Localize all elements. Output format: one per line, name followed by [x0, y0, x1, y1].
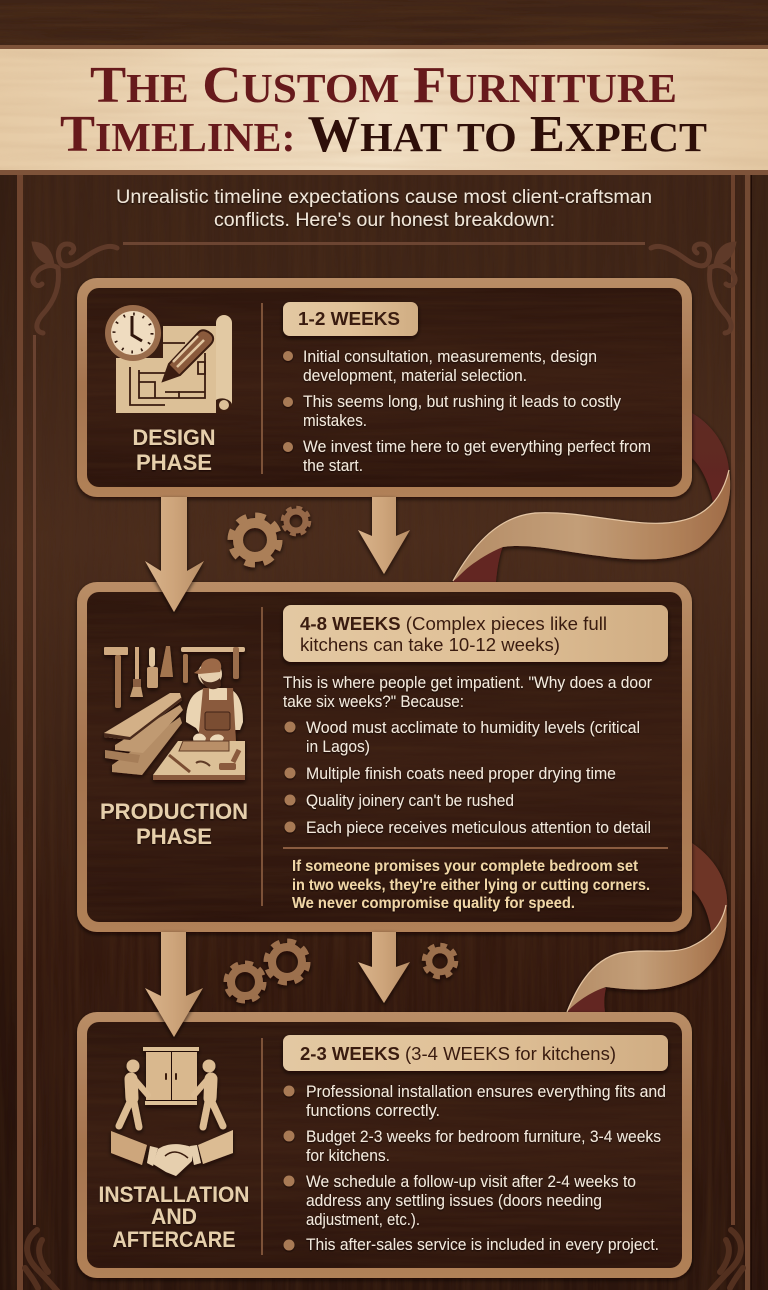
arrow: production to installation, left	[145, 932, 203, 1037]
tools	[104, 646, 245, 708]
gears: set 2	[226, 941, 456, 1001]
callout: warning note: in two weeks, they're either lying or cutting corners.	[292, 877, 650, 894]
divider	[261, 1038, 263, 1255]
mover left	[119, 1060, 148, 1127]
bullet list: design	[283, 348, 651, 475]
bullet list: design: This seems long, but rushing it leads to costly	[303, 393, 622, 411]
panel 2 frame: production phase	[77, 582, 692, 932]
pencil	[163, 330, 213, 381]
arrow: design to production, right	[358, 497, 410, 574]
corner ornament: bottom right	[710, 1230, 743, 1290]
bullet list: production: in Lagos)	[306, 738, 370, 756]
duration pill: 2-3 weeks: 2-3 WEEKS (3-4 WEEKS for kitchens)	[300, 1044, 616, 1064]
bullet list: design: the start.	[303, 457, 363, 475]
ribbon 1	[453, 413, 730, 582]
bullet list: production: Wood must acclimate to humidity levels (critical	[306, 719, 640, 737]
handshake	[111, 1130, 233, 1176]
panel 1 frame: design phase	[77, 278, 692, 497]
duration pill: 4-8 weeks: kitchens can take 10-12 weeks)	[300, 635, 560, 655]
duration pill: 4-8 weeks	[283, 605, 668, 662]
label: installation and aftercare: AND	[151, 1204, 197, 1229]
bullet list: installation	[284, 1083, 666, 1254]
bullet list: design: development, material selection.	[303, 367, 527, 385]
label: production phase: PRODUCTION	[100, 799, 248, 824]
callout divider	[283, 847, 668, 849]
divider	[261, 303, 263, 474]
duration pill: 4-8 weeks: 4-8 WEEKS (Complex pieces like full	[300, 614, 607, 634]
label: design phase: PHASE	[136, 450, 212, 475]
intro paragraph: production: This is where people get impatient. "Why does a door	[283, 674, 652, 692]
label: production phase	[100, 799, 248, 849]
callout: warning note: We never compromise quality for speed.	[292, 895, 575, 912]
label: installation and aftercare: AFTERCARE	[112, 1227, 236, 1252]
bullet list: installation: for kitchens.	[306, 1147, 390, 1165]
duration pill: 2-3 weeks	[283, 1035, 668, 1071]
label: design phase	[132, 425, 216, 475]
bullet list: installation: We schedule a follow-up visit after 2-4 weeks to	[306, 1173, 636, 1191]
intro text: conflicts. Here's our honest breakdown:	[214, 210, 555, 231]
bench	[153, 741, 245, 780]
bullet list: installation: address any settling issues (doors needing	[306, 1192, 602, 1210]
bullet list: production: Each piece receives meticulous attention to detail	[306, 819, 651, 837]
bullet list: production: Multiple finish coats need proper drying time	[306, 765, 616, 783]
icon: carpenter at workbench	[104, 646, 245, 780]
bullet list: production	[284, 719, 651, 837]
title banner	[0, 45, 768, 175]
title: THE CUSTOM FURNITURE	[90, 57, 677, 114]
corner ornament: top left	[32, 242, 117, 333]
title	[60, 57, 707, 163]
intro divider line	[123, 242, 645, 245]
bullet list: production: Quality joinery can't be rushed	[306, 792, 514, 810]
bullet list: installation: functions correctly.	[306, 1102, 440, 1120]
panel 3 frame: installation and aftercare	[77, 1012, 692, 1278]
label: design phase: DESIGN	[132, 425, 216, 450]
bullet list: design: mistakes.	[303, 412, 367, 430]
intro paragraph: production	[283, 674, 652, 711]
duration pill: 1-2 weeks: 1-2 WEEKS	[298, 309, 400, 329]
bullet list: design: We invest time here to get everything perfect from	[303, 438, 651, 456]
arrow: design to production, left	[145, 497, 204, 612]
icon: movers and handshake	[111, 1047, 233, 1176]
intro text	[116, 187, 652, 231]
bullet list: installation: Professional installation ensures everything fits and	[306, 1083, 666, 1101]
callout: warning note	[292, 858, 650, 912]
bullet list: installation: This after-sales service is included in every project.	[306, 1236, 659, 1254]
bullet list: installation: adjustment, etc.).	[306, 1211, 420, 1229]
title: TIMELINE: WHAT TO EXPECT	[60, 106, 707, 163]
icon: blueprint with clock and pencil	[105, 305, 232, 413]
ribbon 2	[567, 843, 727, 1012]
bullet list: design: Initial consultation, measurements, design	[303, 348, 597, 366]
gears: set 1	[231, 508, 309, 564]
intro paragraph: production: take six weeks?" Because:	[283, 693, 464, 711]
label: installation and aftercare: INSTALLATION	[98, 1182, 250, 1207]
mover right	[194, 1060, 223, 1127]
corner ornament: bottom left	[25, 1230, 58, 1290]
label: installation and aftercare	[98, 1182, 250, 1252]
planks	[104, 693, 183, 775]
intro text: Unrealistic timeline expectations cause most client-craftsman	[116, 187, 652, 208]
duration pill: 1-2 weeks	[283, 302, 418, 336]
label: production phase: PHASE	[136, 824, 212, 849]
callout: warning note: If someone promises your complete bedroom set	[292, 858, 639, 875]
divider	[261, 607, 263, 906]
carpenter	[186, 658, 243, 745]
clock	[105, 305, 161, 361]
cabinet	[143, 1047, 199, 1105]
arrow: production to installation, right	[358, 932, 410, 1003]
corner ornament: top right	[651, 242, 736, 333]
top wood band	[0, 0, 768, 46]
bullet list: installation: Budget 2-3 weeks for bedroom furniture, 3-4 weeks	[306, 1128, 661, 1146]
